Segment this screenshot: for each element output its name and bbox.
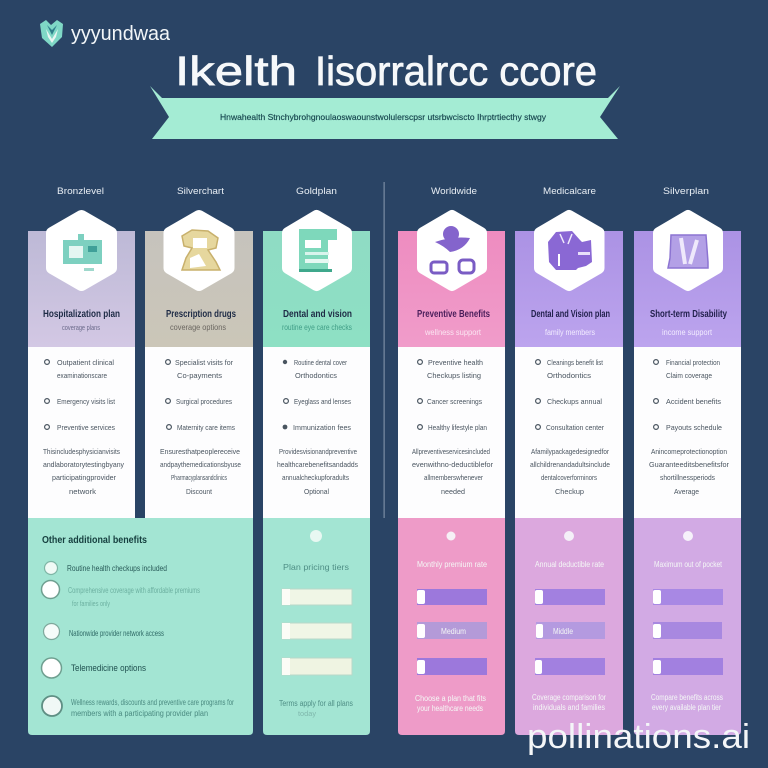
bar 1 (535, 589, 605, 605)
title (175, 48, 597, 94)
bar 2 (653, 622, 722, 639)
card footer text (651, 693, 723, 712)
center divider (384, 182, 385, 518)
card 4 benefits: needed (441, 487, 465, 496)
panel: lilac bottom card 3 (634, 518, 741, 735)
card footer text (415, 694, 486, 713)
card 5 benefits: Consultation center (546, 423, 604, 432)
card footer text: today (298, 711, 317, 718)
card 2 benefits: Discount (186, 487, 213, 496)
list item 2 (42, 580, 200, 608)
card 1 heading (43, 309, 120, 332)
card 1 heading: Hospitalization plan (43, 309, 120, 320)
list item 2: Comprehensive coverage with affordable premiums (68, 585, 200, 595)
card 4 benefits: Cancer screenings (427, 397, 482, 406)
card 2 benefits: Co-payments (177, 371, 222, 380)
card 2 benefits: Pharmacyplansandclinics (171, 473, 227, 482)
card footer text: Terms apply for all plans (279, 699, 353, 708)
card 1 benefits: Outpatient clinical (57, 358, 114, 367)
card 4 benefits: Preventive health (428, 358, 483, 367)
card 6 benefits: shortillnessperiods (660, 473, 715, 482)
icon: scales badge (423, 216, 481, 285)
title: Iisorralrcc ccore (315, 48, 597, 94)
card 5 benefits: Checkup (555, 487, 584, 496)
list item 4: Telemedicine options (71, 663, 146, 673)
card 3 benefits: healthcarebenefitsandadds (277, 460, 358, 469)
logo (40, 20, 171, 47)
column headings row: Medicalcare (543, 186, 596, 197)
icon: small badge (446, 532, 456, 540)
card 3 benefits (277, 358, 358, 496)
card 4 heading: wellness support (424, 328, 482, 337)
card 6 benefits: Accident benefits (666, 397, 721, 406)
bar 1 (282, 589, 352, 605)
card 2 benefits: Surgical procedures (176, 397, 232, 406)
panel: column 2 card (145, 216, 253, 518)
card 2 benefits: Specialist visits for (175, 358, 233, 367)
bar 1 (417, 589, 487, 605)
card 6 benefits: Average (674, 487, 699, 496)
card 4 benefits: evenwithno-deductiblefor (412, 460, 493, 469)
card 2 benefits: andpaythemedicationsbyuse (160, 460, 241, 469)
card footer text: your healthcare needs (417, 704, 483, 713)
bar 2 (417, 622, 487, 639)
card 2 heading: Prescription drugs (166, 309, 236, 320)
card 5 benefits: Afamilypackagedesignedfor (531, 447, 609, 456)
bar 1 (653, 589, 723, 605)
card 3 benefits: Orthodontics (295, 371, 337, 380)
card 6 heading: Short-term Disability (650, 309, 727, 320)
card 4 heading (417, 309, 490, 337)
list item 1: Routine health checkups included (67, 563, 167, 573)
card heading: Plan pricing tiers (283, 562, 349, 572)
column headings row: Silverplan (663, 186, 709, 197)
logo wordmark: yyyundwaa (71, 23, 171, 45)
card 1 benefits: network (69, 487, 96, 496)
bar 2 (536, 622, 605, 639)
card 1 benefits: Preventive services (57, 423, 115, 432)
panel: column 5 card (515, 216, 623, 518)
panel: green bottom card (263, 518, 370, 735)
title: Ikelth (175, 48, 297, 94)
card 5 heading: family members (545, 328, 595, 337)
icon: small badge (564, 531, 574, 541)
card heading: Monthly premium rate (417, 560, 487, 569)
panel: column 6 card (634, 216, 741, 518)
card 4 benefits: Allpreventiveservicesincluded (412, 447, 490, 456)
list item 4 (42, 658, 146, 678)
list item 2: for families only (72, 601, 110, 608)
card 5 heading: Dental and Vision plan (531, 309, 610, 320)
bar 2: Medium (441, 627, 466, 636)
list item 3 (44, 624, 164, 640)
card 4 heading: Preventive Benefits (417, 309, 490, 320)
bar 3 (653, 658, 723, 675)
card 6 benefits: Payouts schedule (666, 423, 722, 432)
card 5 benefits: Cleanings benefit list (547, 358, 604, 367)
icon: medical kit badge (170, 216, 228, 285)
bar 3 (282, 658, 352, 675)
card heading: Maximum out of pocket (654, 560, 723, 569)
bar 3 (417, 658, 487, 675)
card 6 benefits: Financial protection (666, 358, 720, 367)
column headings row: Goldplan (296, 186, 337, 197)
card 3 heading: Dental and vision (283, 309, 352, 320)
card 4 benefits (412, 358, 493, 496)
card 3 heading: routine eye care checks (282, 323, 352, 332)
card footer text: Coverage comparison for (532, 693, 606, 702)
card 4 benefits: Healthy lifestyle plan (428, 423, 487, 432)
card 2 benefits (160, 358, 241, 496)
card 1 benefits: examinationscare (57, 371, 107, 380)
card footer text: Choose a plan that fits (415, 694, 486, 703)
card 5 benefits: dentalcoverforminors (541, 473, 597, 482)
panel: column 1 card (28, 216, 135, 518)
card 3 heading (282, 309, 352, 332)
panel: column 3 card (263, 216, 370, 518)
bar 2 (282, 623, 352, 639)
card 4 benefits: Checkups listing (427, 371, 481, 380)
card 5 benefits: Checkups annual (547, 397, 602, 406)
column headings row: Worldwide (431, 186, 477, 197)
card 1 benefits (43, 358, 124, 496)
banner subtitle: Hnwahealth Stnchybrohgnoulaoswaounstwolulerscpsr utsrbwciscto Ihrptrtiecthy stwgy (220, 112, 547, 122)
list heading: Other additional benefits (42, 535, 147, 546)
icon: document badge (288, 216, 346, 285)
card 3 benefits: Providesvisionandpreventive (279, 447, 357, 456)
watermark: pollinations.ai (527, 718, 750, 756)
card footer text (532, 693, 606, 712)
card 2 benefits: Ensuresthatpeoplereceive (160, 447, 240, 456)
card 1 benefits: participatingprovider (52, 473, 116, 482)
card 2 benefits: Maternity care items (177, 423, 235, 432)
card 1 benefits: Thisincludesphysicianvisits (43, 447, 120, 456)
icon: shield logo (40, 20, 63, 47)
list item 1 (44, 562, 167, 574)
card 3 benefits: Optional (304, 487, 329, 496)
bar 3 (535, 658, 605, 675)
card 2 heading: coverage options (170, 323, 226, 332)
card 3 benefits: Immunization fees (293, 423, 351, 432)
card footer text: individuals and families (533, 703, 605, 712)
panel: additional benefits list (28, 518, 253, 735)
card 5 benefits: Orthodontics (547, 371, 591, 380)
card 6 benefits: Claim coverage (666, 371, 712, 380)
panel: column 4 card (398, 216, 505, 518)
column headings row (57, 186, 709, 197)
card 3 benefits: Routine dental cover (294, 358, 347, 367)
card 4 benefits: allmemberswhenever (424, 473, 483, 482)
column headings row: Silverchart (177, 186, 224, 197)
card 5 heading (531, 309, 610, 337)
list item 5 (42, 696, 234, 718)
card heading: Annual deductible rate (535, 560, 604, 569)
card 3 benefits: annualcheckupforadults (282, 473, 349, 482)
panel: pink bottom card (398, 518, 505, 735)
panel: lilac bottom card 2 (515, 518, 623, 735)
card footer text: every available plan tier (652, 703, 721, 712)
bar 2: Middle (553, 627, 573, 636)
icon: small badge (310, 530, 322, 542)
icon: book badge (659, 216, 717, 285)
card 1 benefits: andlaboratorytestingbyany (43, 460, 124, 469)
card 5 benefits: allchildrenandadultsinclude (530, 460, 610, 469)
icon: family badge (540, 216, 598, 285)
card 1 heading: coverage plans (62, 323, 100, 332)
card 3 benefits: Eyeglass and lenses (294, 397, 351, 406)
column headings row: Bronzlevel (57, 186, 104, 197)
card 2 heading (166, 309, 236, 332)
list item 5: Wellness rewards, discounts and preventive care programs for (71, 697, 234, 707)
icon: small badge (683, 531, 693, 541)
card 6 benefits: Anincomeprotectionoption (651, 447, 727, 456)
list item 3: Nationwide provider network access (69, 628, 164, 638)
card 6 benefits: Guaranteeditsbenefitsfor (649, 460, 729, 469)
card 6 benefits (649, 358, 729, 496)
card 6 heading: income support (662, 328, 713, 337)
card 1 benefits: Emergency visits list (57, 397, 116, 406)
card 5 benefits (530, 358, 610, 496)
card footer text: Compare benefits across (651, 693, 723, 702)
card footer text (279, 699, 353, 718)
card 6 heading (650, 309, 727, 337)
icon: hospital badge (52, 216, 111, 285)
list item 5: members with a participating provider plan (71, 709, 208, 718)
banner ribbon (150, 86, 620, 139)
